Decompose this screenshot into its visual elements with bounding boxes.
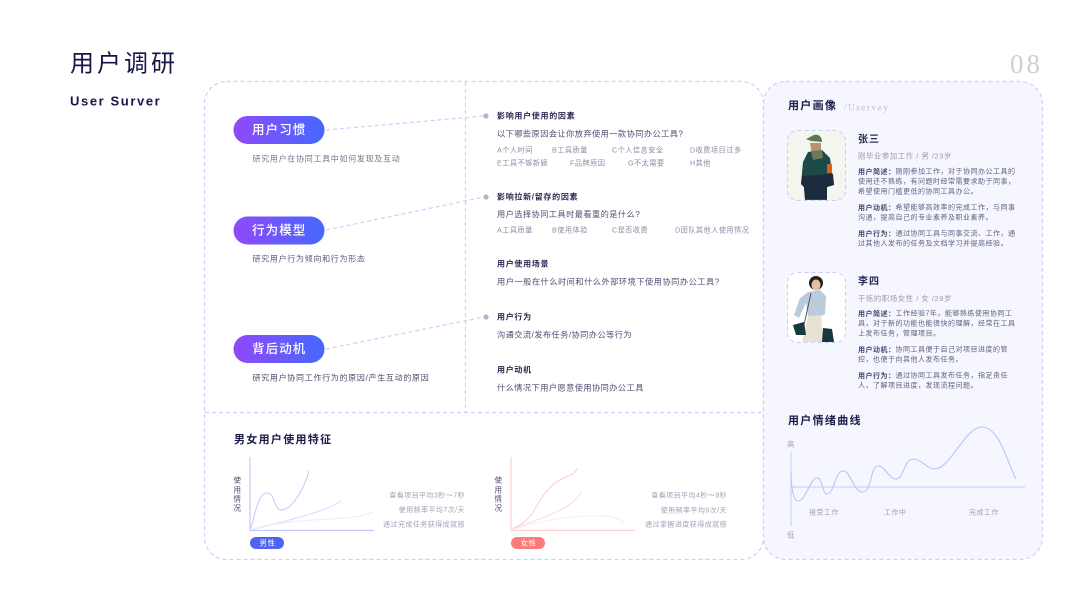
profile: Li Si: 用户简述：工作经验7年，能够熟练使用协同工 [858, 308, 1012, 318]
heading: user portrait: 用户画像 [788, 98, 837, 112]
subtitle: User Surver [70, 94, 161, 108]
profile: Zhang San: 刚毕业参加工作 / 男 /23岁 [858, 152, 952, 160]
category: motivation [234, 335, 429, 382]
profile: Li Si: 上发布任务，管理项目。 [858, 328, 940, 338]
category: motivation: 研究用户协同工作行为的原因/产生互动的原因 [252, 372, 429, 382]
question block: retention factors: D团队其他人使用情况 [675, 226, 749, 234]
profile: Li Si: 李四 [858, 274, 880, 288]
chart: emotion curve [787, 427, 1025, 540]
profile: Zhang San: 张三 [858, 132, 880, 146]
profile: Zhang San: 用户简述：刚刚参加工作，对于协同办公工具的 [858, 166, 1016, 176]
question block: usage factors: A个人时间 [497, 146, 533, 154]
question block: retention factors [497, 192, 749, 234]
profile: Zhang San: 用户动机：希望能够高效率的完成工作，与同事 [858, 202, 1016, 212]
question block: retention factors: A工具质量 [497, 226, 533, 234]
question block: user behavior [497, 312, 632, 340]
chart: male usage: 使用频率平均7次/天 [399, 505, 465, 514]
chart: female usage: 情 [494, 494, 502, 504]
category: user habits: 研究用户在协同工具中如何发现及互动 [252, 154, 400, 164]
profile: Zhang San: 使用还不熟练，有问题时经常需要求助于同事， [858, 176, 1016, 186]
category: behavior model: 研究用户行为倾向和行为形态 [252, 254, 366, 264]
chart: emotion curve: 工作中 [884, 508, 906, 516]
category: behavior model [234, 216, 366, 264]
profile: Li Si [858, 274, 1016, 390]
question block: user behavior: 沟通交流/发布任务/协同办公等行为 [497, 330, 632, 340]
profile: Zhang San: 希望使用门槛更低的协同工具办公。 [858, 186, 978, 196]
question block: retention factors: 影响拉新/留存的因素 [497, 192, 578, 202]
question block: usage factors: G不太需要 [628, 158, 665, 168]
profile: Li Si: 具，对于新的功能也能很快的理解，经常在工具 [858, 318, 1016, 328]
chart: emotion curve: 低 [787, 530, 795, 540]
chart: emotion curve: 高 [787, 438, 795, 448]
question block: usage factors: H其他 [690, 158, 711, 168]
title: 用户调研 [70, 50, 178, 78]
profile: Li Si: 人，了解项目进度，发现流程问题。 [858, 380, 978, 390]
profile: Li Si: 控，也便于向其他人发布任务。 [858, 354, 963, 364]
question block: usage factors: F品牌原因 [570, 158, 605, 168]
heading suffix: /Uservey [844, 102, 889, 112]
category: user habits: 用户习惯 [252, 122, 306, 137]
heading: gender usage features: 男女用户使用特征 [234, 432, 332, 446]
profile: Zhang San: 用户行为：通过协同工具与同事交流、工作，通 [858, 228, 1016, 238]
profile: Zhang San [858, 132, 1016, 248]
chart: female usage [494, 457, 727, 549]
heading: emotion curve: 用户情绪曲线 [788, 413, 862, 427]
photo: male user [788, 130, 846, 200]
chart: female usage: 使 [494, 474, 502, 484]
question block: retention factors: B使用体验 [552, 226, 588, 234]
chart: male usage [234, 457, 465, 549]
chart: emotion curve: 接受工作 [809, 508, 839, 516]
question block: usage scenario: 用户使用场景 [497, 258, 549, 268]
question block: usage factors: C个人信息安全 [612, 146, 664, 154]
chart: male usage: 使 [234, 474, 242, 484]
chart: female usage: 女性 [520, 538, 536, 548]
panel: user portrait background [764, 82, 1042, 560]
photo: female user [788, 272, 846, 342]
panel: research framework [204, 82, 764, 560]
chart: male usage: 通过完成任务获得成就感 [383, 520, 465, 528]
question block: usage factors: E工具不够新颖 [497, 158, 548, 168]
profile: Li Si: 用户行为：通过协同工具发布任务，指定责任 [858, 370, 1008, 380]
question block: user motivation [497, 364, 644, 392]
chart: female usage: 查看项目平均4秒～9秒 [651, 490, 727, 500]
question block: user motivation: 用户动机 [497, 364, 532, 374]
chart: female usage: 用 [494, 486, 502, 494]
question block: user behavior: 用户行为 [497, 312, 532, 322]
page number: 08 [1010, 49, 1043, 79]
category: behavior model: 行为模型 [252, 222, 306, 238]
chart: male usage: 情 [234, 494, 242, 504]
question block: user motivation: 什么情况下用户愿意使用协同办公工具 [497, 382, 644, 392]
chart: female usage: 通过掌握进度获得成就感 [645, 520, 727, 528]
chart: emotion curve: 完成工作 [969, 508, 999, 516]
question block: usage factors: 影响用户使用的因素 [497, 110, 575, 120]
question block: usage factors: B工具质量 [552, 146, 588, 154]
question block: usage scenario: 用户一般在什么时间和什么外部环境下使用协同办公工具? [497, 276, 720, 286]
category: motivation: 背后动机 [252, 341, 306, 356]
chart: female usage: 况 [494, 504, 502, 512]
connector arrows [326, 113, 489, 349]
profile: Li Si: 干练的职场女性 / 女 /29岁 [858, 294, 952, 303]
chart: female usage: 使用频率平均9次/天 [661, 506, 727, 514]
profile: Zhang San: 沟通，提高自己的专业素养及职业素养。 [858, 212, 993, 222]
chart: male usage: 男性 [260, 538, 276, 548]
question block: usage factors: D收费项目过多 [690, 146, 741, 154]
profile: Zhang San: 过其他人发布的任务及文档学习并提高经验。 [858, 238, 1008, 248]
question block: retention factors: 用户选择协同工具时最看重的是什么? [497, 209, 640, 219]
question block: retention factors: C是否收费 [612, 226, 648, 234]
question block: usage scenario [497, 258, 720, 286]
category: user habits [234, 116, 400, 164]
profile: Li Si: 用户动机：协同工具便于自己对项目进度的管 [858, 344, 1008, 354]
chart: male usage: 用 [234, 486, 241, 494]
chart: male usage: 查看项目平均3秒～7秒 [389, 490, 465, 500]
chart: male usage: 况 [234, 504, 242, 512]
question block: usage factors: 以下哪些原因会让你放弃使用一款协同办公工具? [497, 128, 683, 138]
question block: usage factors [497, 110, 741, 168]
